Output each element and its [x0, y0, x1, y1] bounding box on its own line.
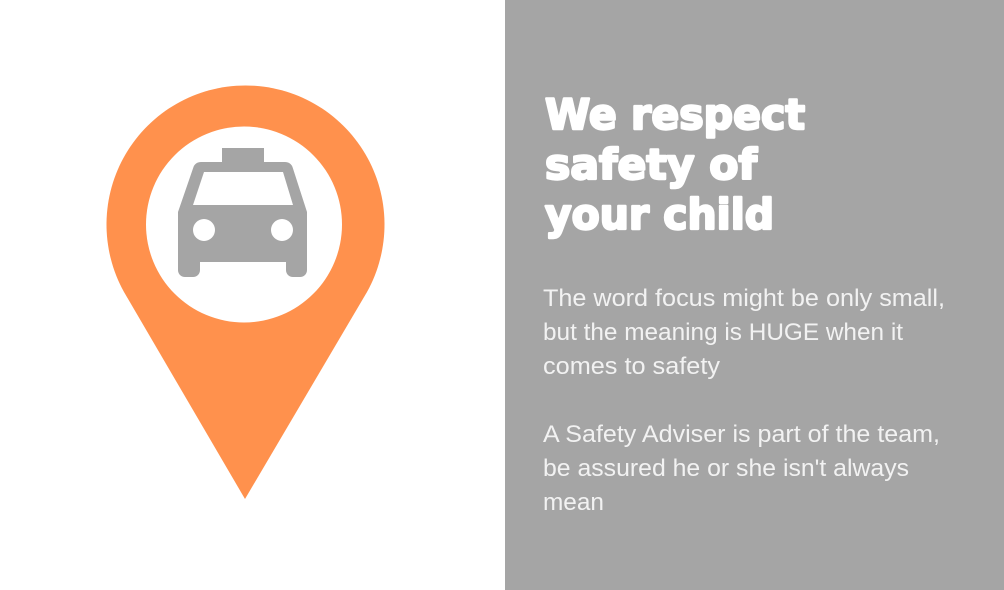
icon: taxi front view — [178, 148, 307, 277]
heading: your child — [545, 190, 774, 239]
pin inner white circle — [146, 126, 342, 322]
text block: safety adviser paragraph — [543, 421, 940, 516]
text block: focus paragraph: comes to safety — [543, 353, 720, 380]
panel: grey text background — [505, 0, 1004, 590]
icon: orange location pin with taxi — [107, 85, 385, 499]
text block: focus paragraph — [543, 285, 945, 380]
heading: We respect — [545, 90, 805, 139]
text block: safety adviser paragraph: be assured he or she isn't always — [543, 455, 909, 482]
heading — [545, 90, 805, 239]
text block: focus paragraph: The word focus might be only small, — [543, 285, 945, 312]
heading: safety of — [545, 140, 758, 189]
pin body — [107, 85, 385, 499]
text block: safety adviser paragraph: mean — [543, 489, 604, 516]
text block: safety adviser paragraph: A Safety Adviser is part of the team, — [543, 421, 940, 448]
text block: focus paragraph: but the meaning is HUGE when it — [543, 319, 903, 346]
